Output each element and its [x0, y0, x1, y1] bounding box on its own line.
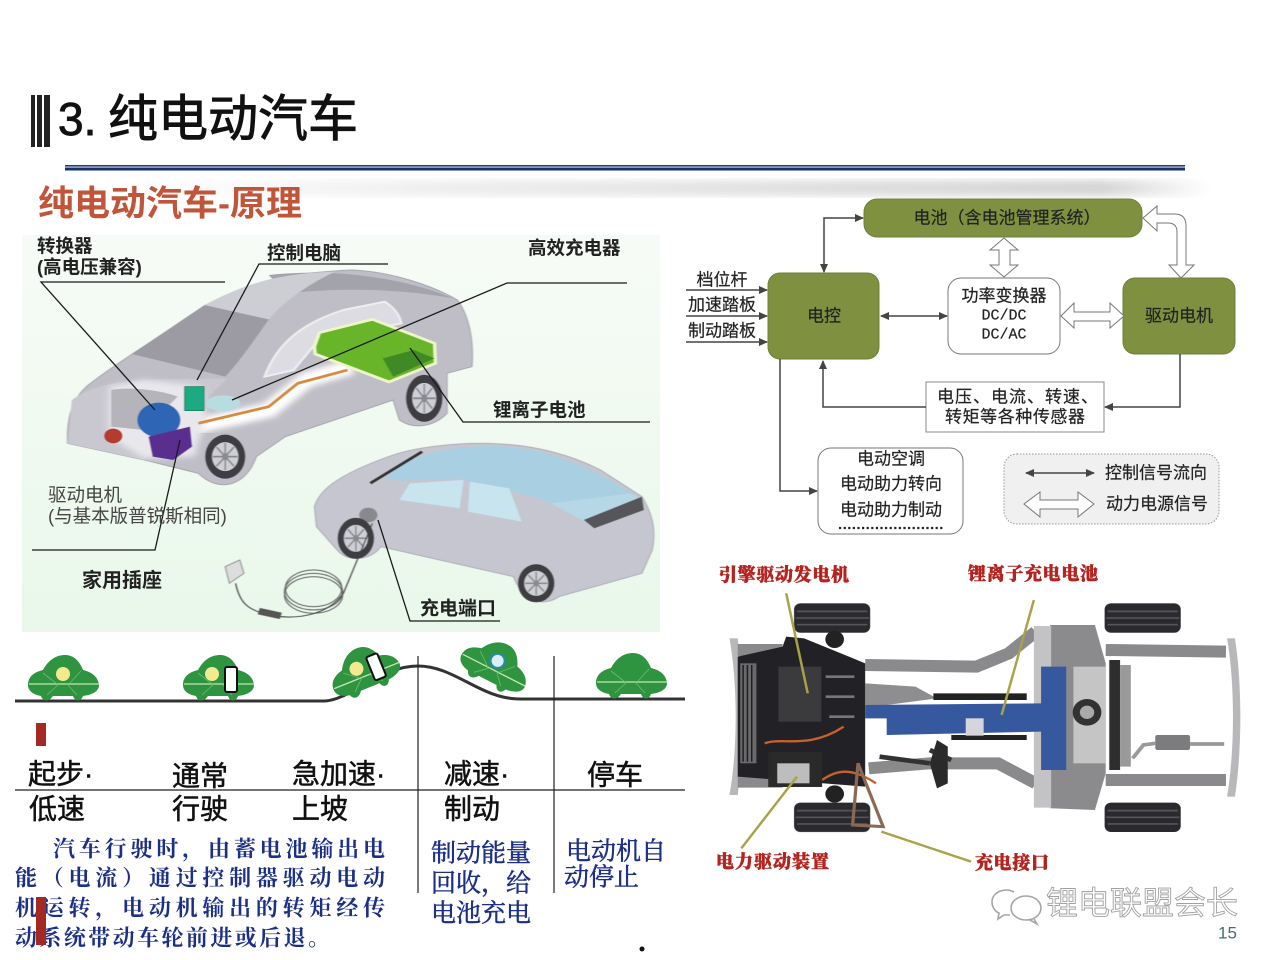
footer dot — [640, 946, 644, 952]
car callout labels: 转换器 — [37, 236, 93, 256]
legend: 动力电源信号 — [1106, 494, 1208, 514]
power converter block: DC/AC — [981, 326, 1027, 344]
car callout labels: 高效充电器 — [528, 238, 621, 258]
stage headings: 行驶 — [172, 794, 228, 824]
title: 3. — [58, 93, 96, 145]
panel: driving stages — [15, 628, 685, 950]
car: cruising — [183, 655, 254, 700]
battery block: 电池（含电池管理系统） — [914, 208, 1100, 228]
chassis labels — [716, 563, 1098, 873]
power converter block: 功率变换器 — [962, 286, 1046, 306]
car callout labels: 锂离子电池 — [493, 400, 586, 420]
watermark: 锂电联盟会长 — [1046, 885, 1238, 921]
car callout labels: (与基本版普锐斯相同) — [48, 506, 227, 526]
car callout labels: 驱动电机 — [48, 484, 123, 506]
description: driving: 能（电流）通过控制器驱动电动 — [15, 866, 385, 890]
description: driving — [15, 836, 385, 950]
bottom car — [314, 443, 654, 602]
description: braking — [431, 840, 531, 928]
car callout labels: 家用插座 — [82, 568, 162, 592]
car: braking — [454, 628, 538, 701]
battery T-shape — [865, 667, 1066, 770]
chassis labels: 引擎驱动发电机 — [719, 564, 849, 585]
input labels: 加速踏板 — [688, 296, 756, 314]
description: braking: 电池充电 — [431, 900, 531, 928]
callout lines — [32, 264, 650, 621]
description: stop: 电动机自 — [566, 838, 666, 866]
accessories block: 电动助力制动 — [840, 500, 942, 520]
chassis labels: 电力驱动装置 — [716, 851, 829, 872]
rear floor — [1050, 625, 1106, 810]
title bars icon — [31, 95, 50, 147]
sensors block — [926, 382, 1104, 432]
battery block — [864, 199, 1142, 237]
car callout labels — [37, 236, 621, 620]
car callout labels: 控制电脑 — [267, 242, 341, 264]
sensors block: 电压、电流、转速、 — [937, 388, 1098, 406]
chassis labels: 锂离子充电电池 — [968, 563, 1098, 584]
stage headings: 上坡 — [292, 794, 348, 824]
input labels — [688, 270, 756, 340]
pointer lines — [741, 593, 1034, 862]
description: braking: 制动能量 — [431, 840, 531, 868]
stage headings: 低速 — [29, 794, 85, 824]
power arrow: battery to motor — [1143, 206, 1194, 278]
power converter block: DC/DC — [981, 308, 1027, 324]
crossmember — [1034, 626, 1051, 808]
accessories block — [818, 448, 963, 534]
input labels: 制动踏板 — [688, 322, 756, 340]
stage headings — [28, 758, 643, 824]
input labels: 档位杆 — [696, 270, 748, 290]
panel: system block diagram — [686, 199, 1235, 534]
chassis labels: 充电接口 — [975, 852, 1049, 873]
car callout labels: 充电端口 — [420, 596, 496, 620]
panel: chassis illustration — [716, 563, 1240, 873]
description: driving: 动系统带动车轮前进或后退。 — [15, 926, 330, 950]
sensors block: 转矩等各种传感器 — [945, 408, 1085, 426]
car: acceleration — [322, 635, 405, 704]
description: stop: 动停止 — [564, 864, 639, 892]
panel: car cutaway illustration — [22, 235, 660, 632]
control signal arrows — [686, 218, 1180, 491]
motor block: 驱动电机 — [1145, 306, 1213, 326]
bumpers — [729, 638, 742, 795]
stage headings: 起步· — [28, 758, 93, 790]
frame rails — [738, 632, 1226, 783]
title: 纯电动汽车 — [108, 91, 358, 147]
description: driving: 汽车行驶时，由蓄电池输出电 — [53, 836, 385, 862]
controller block: 电控 — [807, 306, 841, 326]
stage headings: 制动 — [444, 794, 500, 824]
car: start — [28, 655, 99, 700]
car: stop — [596, 653, 667, 698]
stage headings: 通常 — [172, 760, 228, 792]
stage dividers — [15, 656, 685, 893]
description: driving: 机运转，电动机输出的转矩经传 — [15, 896, 385, 922]
legend: 控制信号流向 — [1105, 464, 1207, 482]
motor block — [1123, 278, 1235, 354]
car callout labels: (高电压兼容) — [37, 256, 142, 278]
accessories block: 电动助力转向 — [840, 474, 942, 494]
stage headings: 急加速· — [292, 758, 385, 790]
top car — [68, 270, 472, 485]
legend — [1004, 454, 1219, 524]
power converter block — [948, 278, 1060, 354]
accessories block: 电动空调 — [857, 450, 925, 468]
stage headings: 减速· — [444, 758, 509, 790]
road curve — [15, 666, 685, 701]
engine bay — [738, 637, 865, 787]
description: braking: 回收，给 — [431, 870, 531, 898]
subtitle: 纯电动汽车-原理 — [38, 184, 302, 224]
tires — [794, 603, 1181, 832]
description: stop — [564, 838, 666, 892]
controller block — [768, 273, 879, 359]
charging cable — [225, 523, 372, 619]
exhaust — [1155, 735, 1190, 750]
power arrow: converter to motor — [1061, 303, 1124, 328]
power arrow: battery to converter — [990, 238, 1018, 277]
stage headings: 停车 — [587, 760, 643, 790]
page number: 15 — [1218, 924, 1237, 942]
red markers — [36, 723, 46, 945]
title rule with shadow — [65, 165, 1210, 196]
